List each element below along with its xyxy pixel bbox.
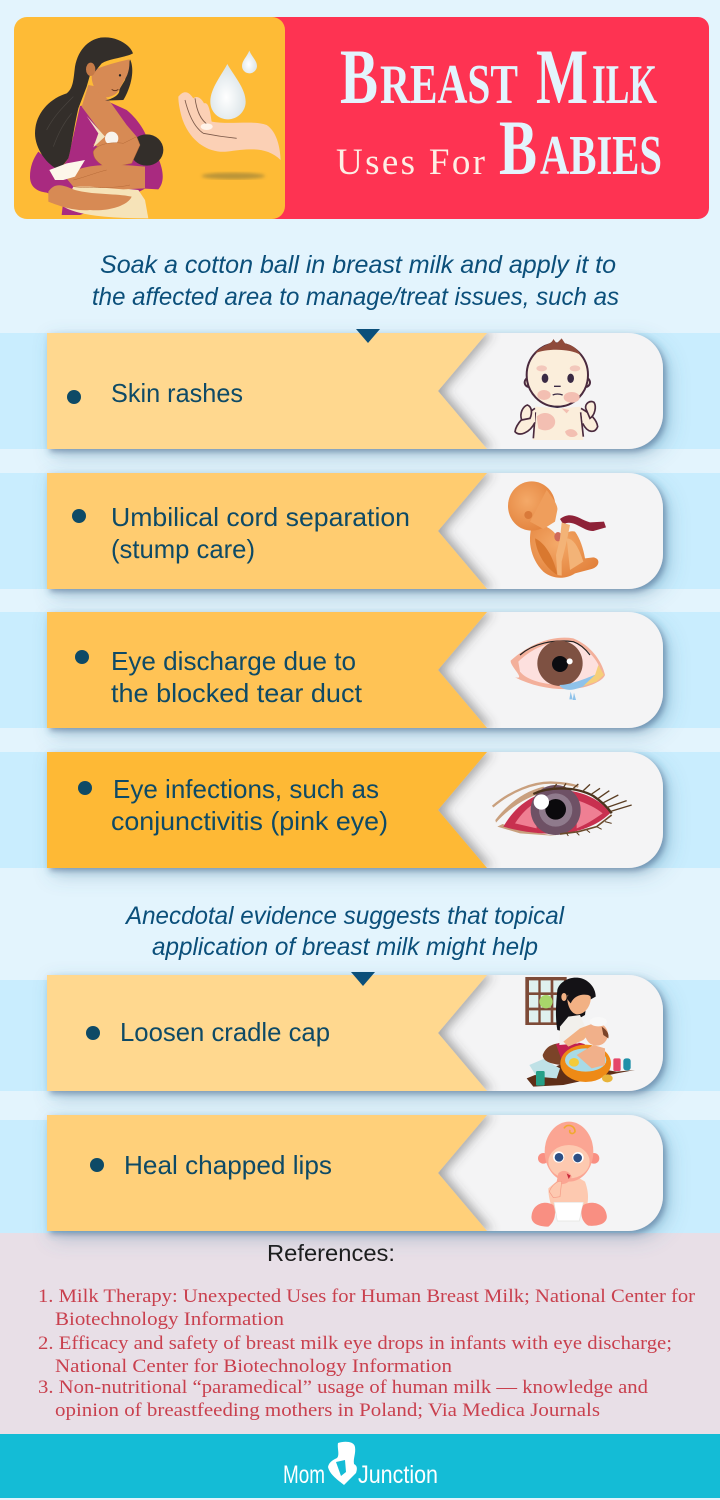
row: eye infections: conjunctivitis (pink eye) <box>111 806 388 836</box>
title: Breast Milk: M <box>536 33 588 120</box>
references list: 3. Non-nutritional “paramedical” usage of human milk — knowledge and <box>38 1377 649 1398</box>
row: eye discharge: the blocked tear duct <box>111 678 363 708</box>
row: chapped lips: Heal chapped lips <box>124 1150 332 1180</box>
references list: Biotechnology Information <box>55 1309 285 1330</box>
header banner <box>14 17 709 219</box>
icon: eye with discharge <box>511 638 605 700</box>
row: cradle cap: Loosen cradle cap <box>120 1017 330 1047</box>
second intro text: Anecdotal evidence suggests that topical <box>124 902 565 930</box>
footer with MomJunction logo: Junction <box>358 1461 438 1489</box>
title: Breast Milk: B <box>340 33 378 120</box>
title: Breast Milk: REAST <box>380 54 518 116</box>
icon: fetus with umbilical cord <box>508 481 606 578</box>
row: umbilical cord: Umbilical cord separation <box>111 502 410 532</box>
second intro text <box>124 902 565 961</box>
logo wordmark: Mom <box>283 1461 325 1489</box>
title: Babies: ABIES <box>540 125 662 187</box>
row: chapped lips <box>0 1115 720 1233</box>
intro text: Soak a cotton ball in breast milk and apply it to <box>100 251 616 279</box>
references panel <box>0 1233 720 1434</box>
row: eye infections: Eye infections, such as <box>113 774 379 804</box>
title: Breast Milk: ILK <box>592 54 657 116</box>
row: skin rashes: Skin rashes <box>111 378 243 408</box>
icon: red pink eye <box>493 783 632 836</box>
illustration: mother breastfeeding baby <box>30 37 163 218</box>
icon: baby with rash <box>515 338 598 440</box>
row: eye infections <box>0 752 720 868</box>
row: umbilical cord <box>0 473 720 589</box>
row: umbilical cord: (stump care) <box>111 534 255 564</box>
row: eye discharge <box>0 612 720 728</box>
intro text <box>92 251 619 311</box>
references list: opinion of breastfeeding mothers in Poland; Via Medica Journals <box>55 1400 600 1421</box>
header yellow illustration panel <box>14 17 285 219</box>
references list: National Center for Biotechnology Information <box>55 1356 453 1377</box>
logo icon: mother and child heart <box>328 1442 357 1485</box>
down arrow 1 <box>356 329 380 343</box>
row: skin rashes <box>0 333 720 449</box>
icon: milk drops over open hand <box>178 51 281 179</box>
subtitle: Uses For: Uses For <box>336 142 485 183</box>
references list: 1. Milk Therapy: Unexpected Uses for Human Breast Milk; National Center for <box>38 1286 696 1307</box>
down arrow 2 <box>351 972 375 986</box>
second intro text: application of breast milk might help <box>152 933 538 961</box>
references list <box>38 1286 696 1421</box>
icon: baby with chapped lips <box>531 1122 607 1227</box>
intro text: the affected area to manage/treat issues, such as <box>92 283 619 311</box>
row: cradle cap <box>0 975 720 1091</box>
references heading: References: <box>267 1240 395 1266</box>
references list: 2. Efficacy and safety of breast milk eye drops in infants with eye discharge; <box>38 1333 672 1354</box>
footer with MomJunction logo <box>0 1434 720 1498</box>
icon: mother bathing baby <box>525 977 635 1087</box>
title: Babies: B <box>499 104 537 191</box>
row: eye discharge: Eye discharge due to <box>111 646 356 676</box>
header red panel <box>200 17 709 219</box>
